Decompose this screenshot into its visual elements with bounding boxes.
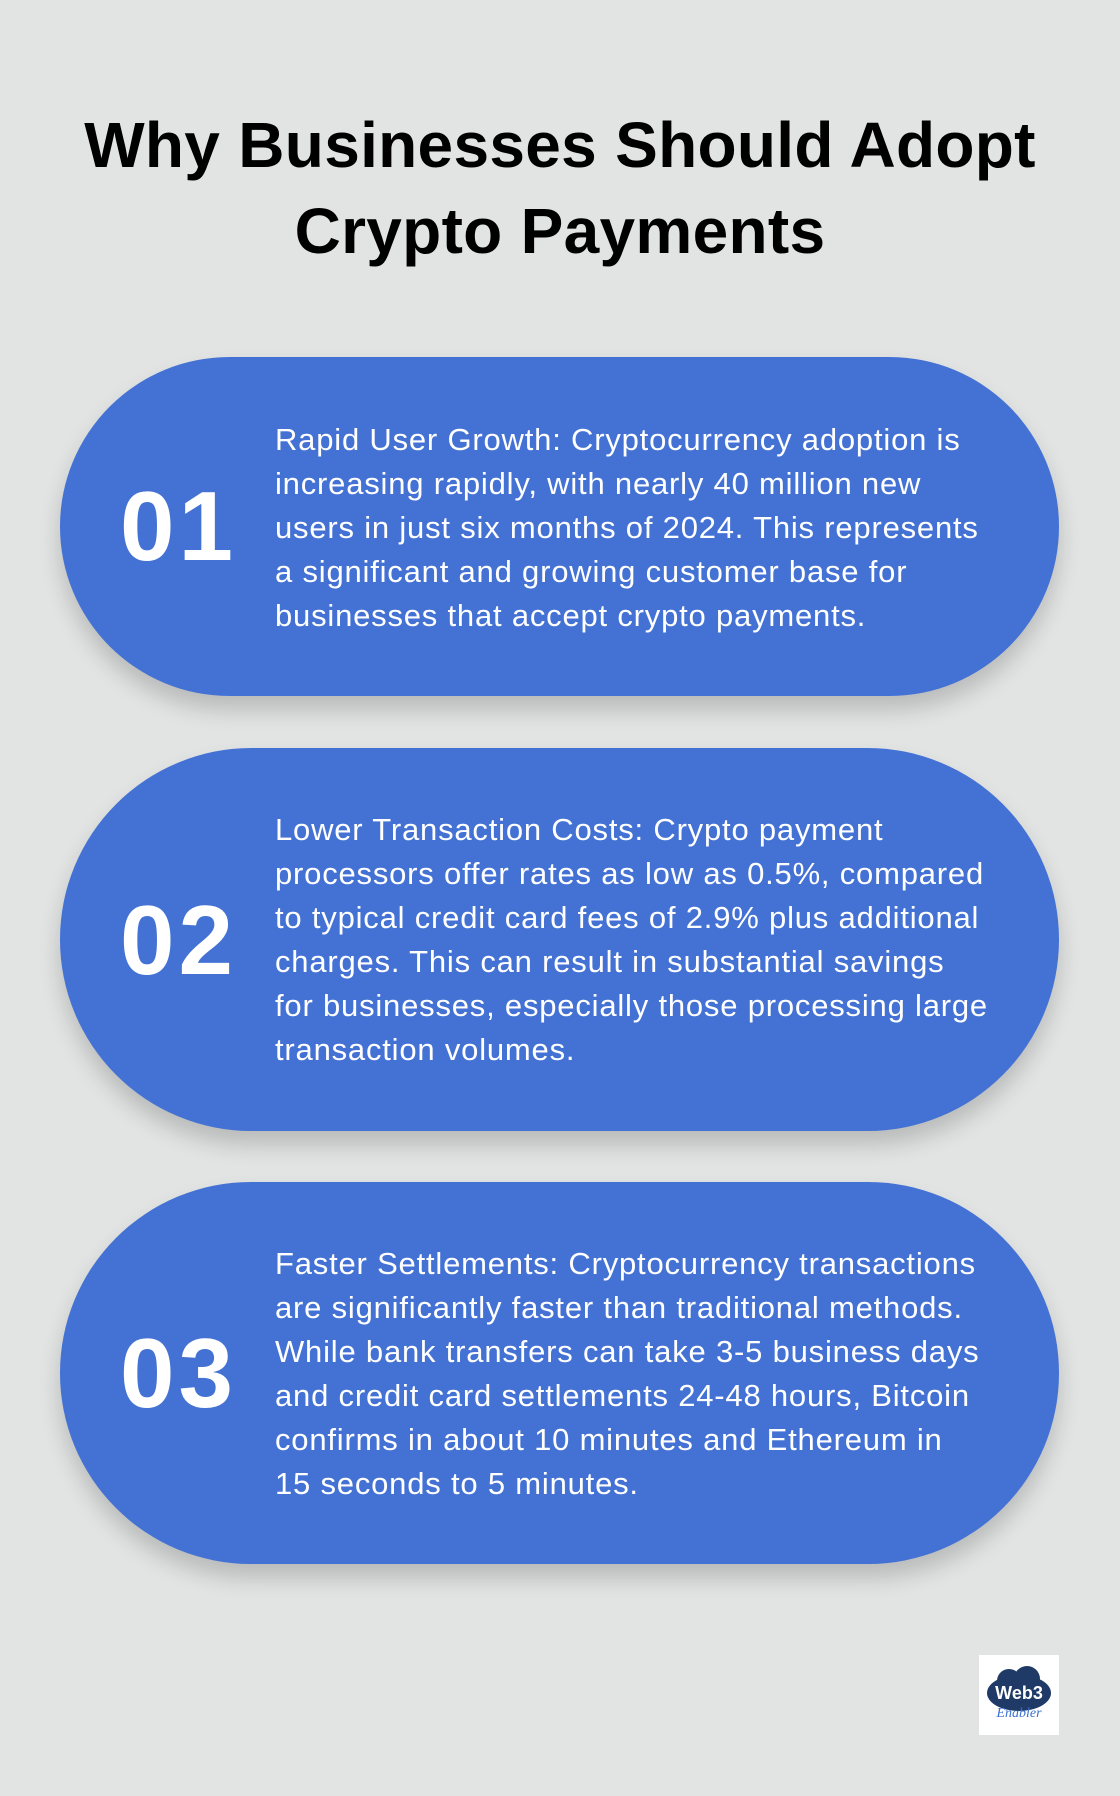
title [84, 109, 1036, 267]
text 01: increasing rapidly, with nearly 40 million new [275, 466, 921, 501]
title: Why Businesses Should Adopt [84, 109, 1036, 181]
panel: 03 faster settlements [60, 1182, 1059, 1564]
logo: Web3 Enabler: Web3 [995, 1683, 1043, 1703]
text 02: charges. This can result in substantial savings [275, 944, 944, 979]
logo: Web3 Enabler [979, 1655, 1059, 1735]
text 02: for businesses, especially those processing large [275, 988, 988, 1023]
text 03: and credit card settlements 24-48 hours, Bitcoin [275, 1378, 970, 1413]
text 01 [275, 422, 979, 633]
text 02 [275, 812, 988, 1067]
text 02: Lower Transaction Costs: Crypto payment [275, 812, 883, 847]
text 03: While bank transfers can take 3-5 business days [275, 1334, 979, 1369]
text 01: businesses that accept crypto payments. [275, 598, 866, 633]
text 03: 15 seconds to 5 minutes. [275, 1466, 639, 1501]
text 02: transaction volumes. [275, 1032, 575, 1067]
text 01: a significant and growing customer base for [275, 554, 907, 589]
text 03: Faster Settlements: Cryptocurrency transactions [275, 1246, 976, 1281]
number 02: 02 [120, 885, 237, 995]
text 02: to typical credit card fees of 2.9% plus additional [275, 900, 979, 935]
text 02: processors offer rates as low as 0.5%, compared [275, 856, 984, 891]
text 03: confirms in about 10 minutes and Ethereum in [275, 1422, 943, 1457]
logo: Web3 Enabler: Enabler [995, 1706, 1042, 1721]
panel: 01 rapid user growth [60, 357, 1059, 696]
text 01: Rapid User Growth: Cryptocurrency adoption is [275, 422, 961, 457]
text 03 [275, 1246, 979, 1501]
number 03: 03 [120, 1318, 237, 1428]
title: Crypto Payments [295, 195, 825, 267]
text 03: are significantly faster than traditional methods. [275, 1290, 963, 1325]
text 01: users in just six months of 2024. This represents [275, 510, 979, 545]
number 01: 01 [120, 471, 237, 581]
panel: 02 lower transaction costs [60, 748, 1059, 1131]
